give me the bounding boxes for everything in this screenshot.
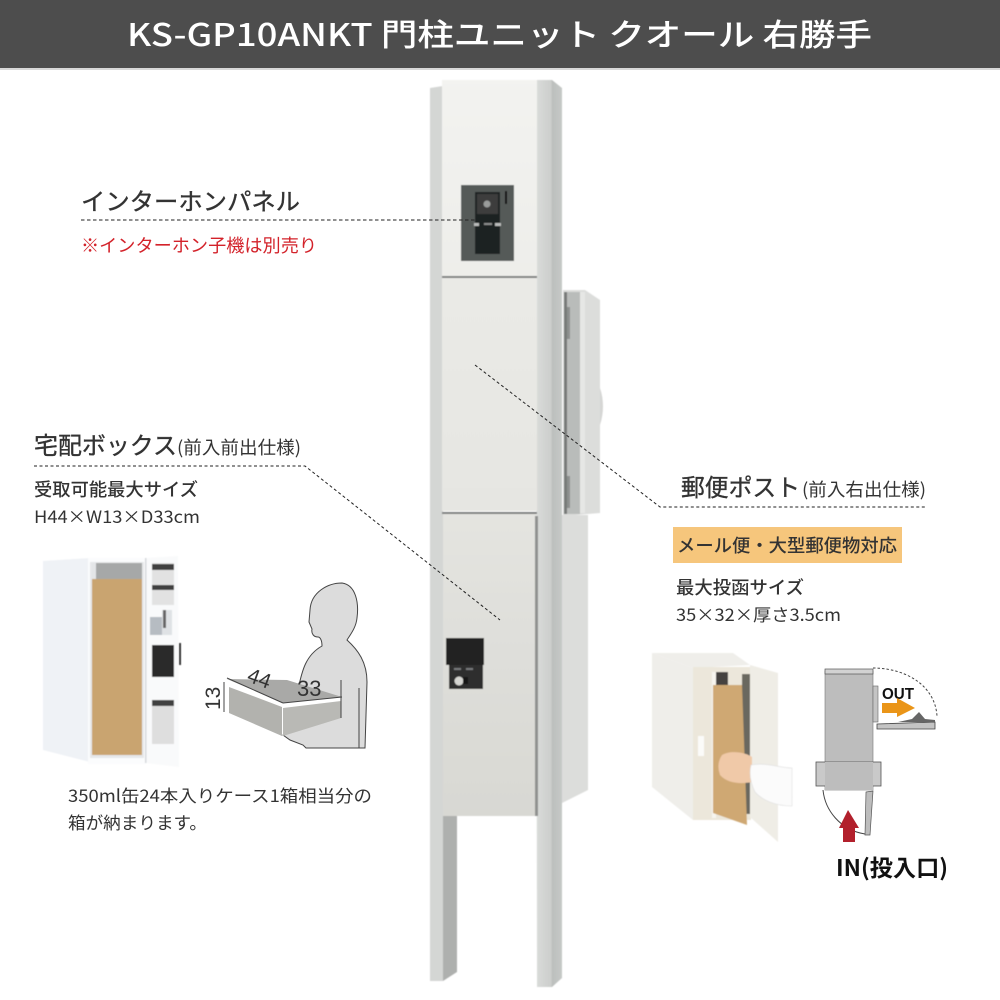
callout: intercom panel: ※インターホン子機は別売り xyxy=(81,232,317,258)
dimension labels: 33 xyxy=(297,676,321,701)
OUT label: OUT xyxy=(882,686,915,703)
orange OUT arrow xyxy=(882,698,915,717)
IN label: IN(投入口) xyxy=(836,849,948,883)
mailbox photo with hand xyxy=(652,653,792,842)
maximum mail size text xyxy=(676,574,841,626)
cardboard box drawing xyxy=(224,678,359,748)
parcel box caption xyxy=(68,782,372,834)
callout: intercom panel: インターホンパネル xyxy=(81,182,300,217)
left post and leg xyxy=(430,86,457,981)
highlight badge: large mail support: メール便・大型郵便物対応 xyxy=(677,532,897,558)
title bar xyxy=(0,0,1000,70)
person holding box illustration xyxy=(202,583,367,748)
dimension labels xyxy=(202,664,321,710)
intercom panel device xyxy=(461,185,514,261)
parcel box caption: 350ml缶24本入りケース1箱相当分の xyxy=(68,782,372,807)
dimension labels: 44 xyxy=(244,664,274,694)
callout: parcel box: H44×W13×D33cm xyxy=(34,503,200,528)
title bar: KS-GP10ANKT 門柱ユニット クオール 右勝手 xyxy=(127,10,872,55)
callout: parcel box: (前入前出仕様) xyxy=(177,434,301,460)
highlight badge: large mail support xyxy=(673,527,902,563)
callout: mailbox xyxy=(475,365,927,507)
parcel box photo xyxy=(43,556,181,767)
delivery tray xyxy=(877,712,935,729)
person silhouette xyxy=(283,583,367,748)
gate pillar unit photo xyxy=(430,80,603,987)
middle mailbox door xyxy=(442,278,537,511)
callout: intercom panel xyxy=(81,182,475,258)
callout: mailbox: (前入右出仕様) xyxy=(802,476,926,502)
red IN arrow xyxy=(839,810,859,842)
maximum mail size text: 35×32×厚さ3.5cm xyxy=(676,601,841,626)
maximum mail size text: 最大投函サイズ xyxy=(676,574,804,600)
parcel box caption: 箱が納まります。 xyxy=(68,809,207,834)
mailbox rear body xyxy=(562,290,603,803)
lower parcel box door xyxy=(443,514,537,816)
parcel box key lock xyxy=(446,638,484,689)
dimension labels: 13 xyxy=(202,687,225,710)
callout: mailbox: 郵便ポスト xyxy=(681,468,800,503)
callout: parcel box: 受取可能最大サイズ xyxy=(34,476,198,502)
open door arc xyxy=(873,668,937,716)
callout: parcel box xyxy=(34,426,500,620)
mailbox cross-section diagram xyxy=(816,668,937,842)
upper intercom panel xyxy=(442,80,537,276)
callout: parcel box: 宅配ボックス xyxy=(34,426,177,461)
front flap xyxy=(823,790,873,835)
right post and leg xyxy=(536,80,562,987)
